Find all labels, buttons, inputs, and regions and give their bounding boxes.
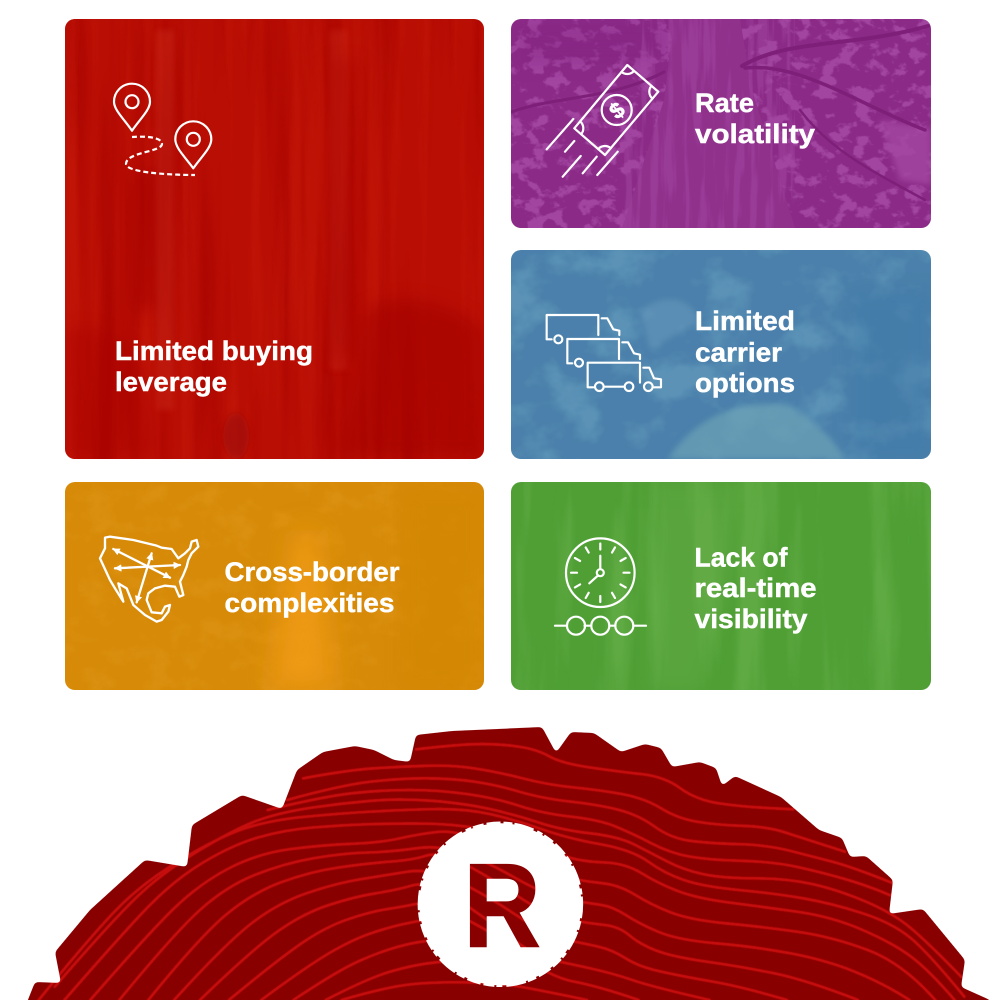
tree stump with growth rings (0, 720, 1000, 1000)
panel background: amber forest (65, 482, 484, 690)
icon: flying dollar bill (547, 65, 658, 177)
tree ring logo (0, 720, 1000, 1000)
logo badge: white R seal (418, 822, 584, 987)
heading: limited carrier options: options (695, 368, 795, 398)
panel: limited carrier options (511, 250, 931, 459)
heading: limited buying leverage: leverage (115, 367, 227, 397)
panel background: blue forest (511, 250, 931, 459)
panel background: red bark texture (65, 19, 484, 459)
icon glyph: dollar sign: $ (604, 97, 630, 124)
heading: limited buying leverage (115, 336, 313, 397)
heading: cross-border complexities (224, 557, 400, 618)
panel background: purple tree canopy (511, 19, 931, 228)
icon: clock above timeline (555, 538, 646, 635)
icon: North America map with arrows (100, 537, 198, 622)
heading: limited carrier options: Limited (695, 306, 795, 336)
heading: rate volatility (695, 88, 815, 149)
heading: limited carrier options: carrier (695, 338, 783, 368)
icon: three delivery trucks (547, 315, 661, 391)
heading: rate volatility: volatility (695, 119, 815, 149)
panel: rate volatility (511, 19, 931, 228)
heading: lack of real-time visibility: real-time (694, 573, 816, 603)
heading: lack of real-time visibility: visibility (694, 604, 808, 634)
heading: lack of real-time visibility: Lack of (694, 542, 788, 572)
heading: limited buying leverage: Limited buying (115, 336, 313, 366)
heading: lack of real-time visibility (694, 542, 816, 634)
panel: cross-border complexities (65, 482, 484, 690)
heading: rate volatility: Rate (695, 88, 754, 118)
panel: limited buying leverage (65, 19, 484, 459)
panel: lack of real-time visibility (511, 482, 931, 690)
icon: route between two map pins (114, 84, 211, 175)
heading: limited carrier options (695, 306, 795, 398)
heading: cross-border complexities: Cross-border (224, 557, 400, 587)
heading: cross-border complexities: complexities (224, 588, 394, 618)
panel background: green bark (511, 482, 931, 690)
